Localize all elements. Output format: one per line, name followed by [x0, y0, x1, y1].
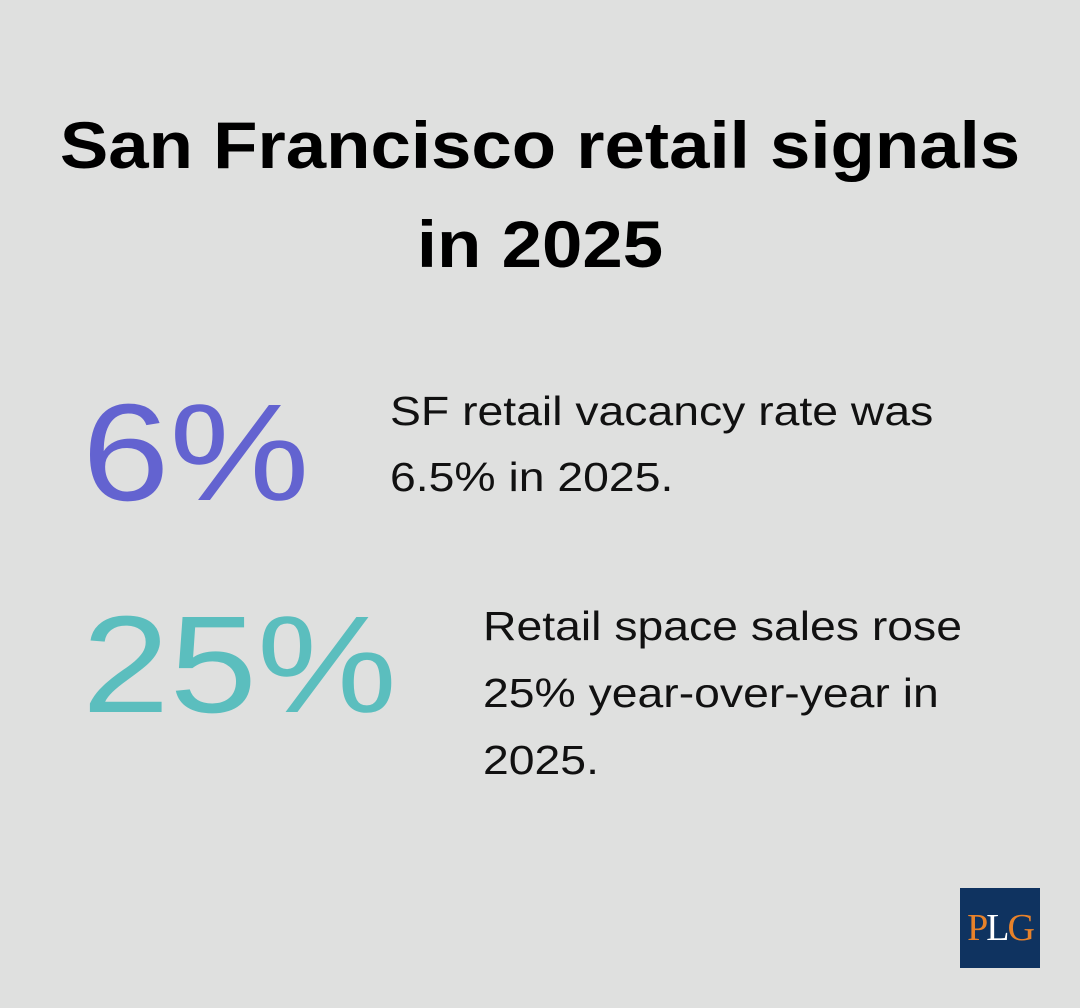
stat: 6%: 6%: [82, 376, 309, 530]
stat: 25%: 25%: [82, 588, 397, 742]
logo: PLG: [960, 888, 1040, 968]
title: [60, 108, 1020, 281]
text: vacancy: SF retail vacancy rate was: [390, 388, 933, 434]
title: San Francisco retail signals: [60, 108, 1020, 182]
text: sales: [483, 603, 962, 783]
text: sales: 2025.: [483, 737, 599, 783]
title: in 2025: [417, 207, 663, 281]
logo: PLG: PLG: [967, 907, 1033, 949]
text: sales: Retail space sales rose: [483, 603, 962, 649]
text: vacancy: [390, 388, 933, 500]
text: vacancy: 6.5% in 2025.: [390, 454, 673, 500]
text: sales: 25% year-over-year in: [483, 670, 939, 716]
